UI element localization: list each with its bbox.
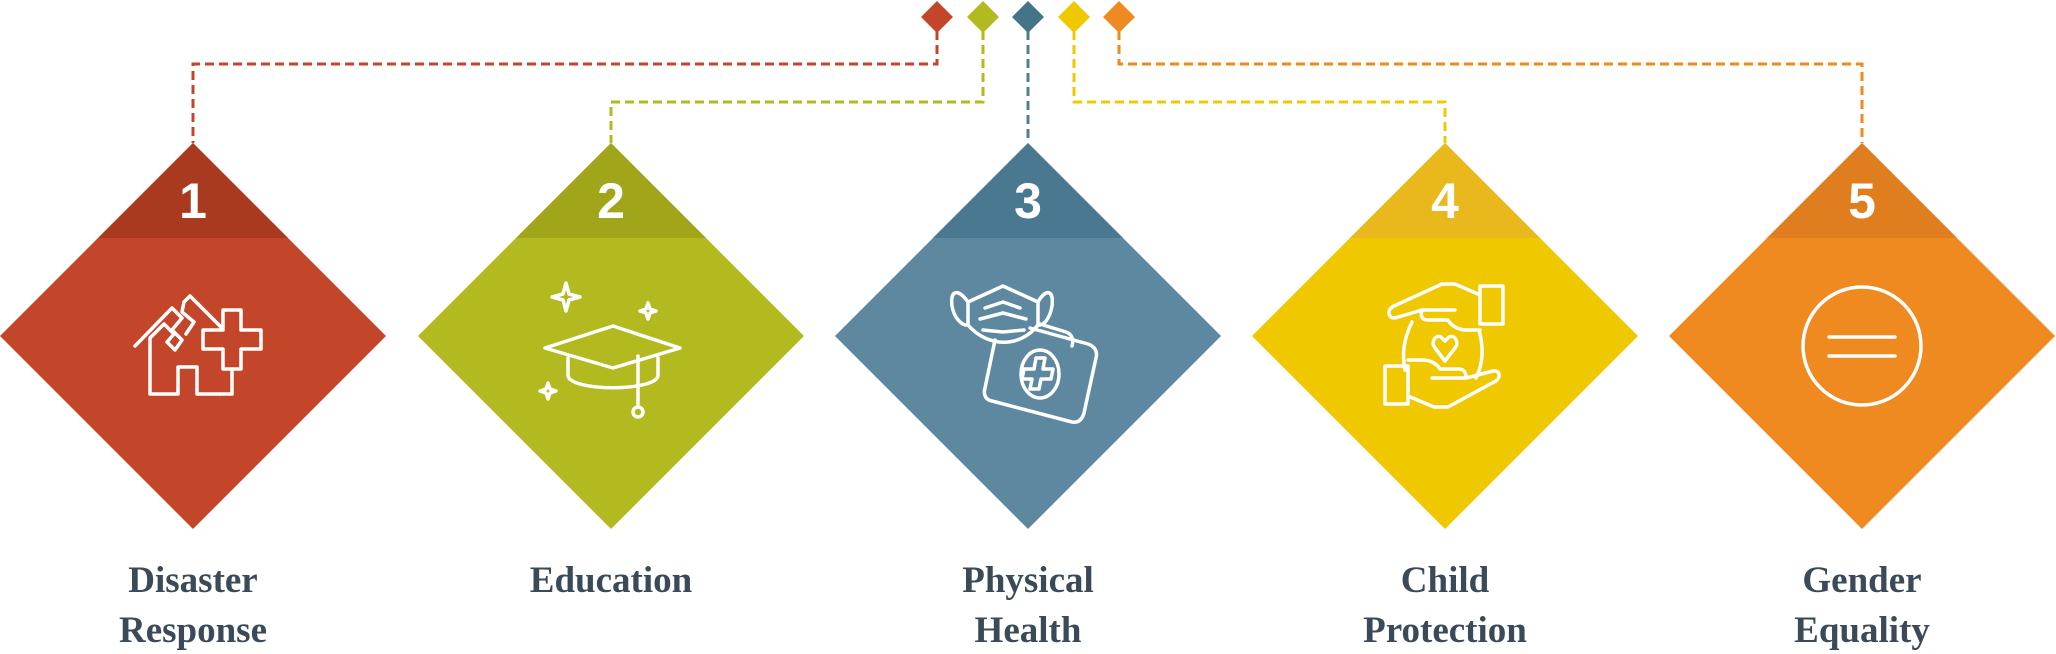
top markers [921,1,1135,33]
panel 3: Physical Health [835,143,1221,651]
panel 4: Child Protection: 4 [1431,173,1459,229]
panel 5: Gender Equality: Equality [1794,610,1930,651]
panel 2: Education [418,143,804,601]
panel 2: Education: Education [530,560,693,601]
panel 1: Disaster Response [0,143,386,651]
connector lines [193,17,1862,143]
panel 1: Disaster Response: Response [119,610,267,651]
icon: equals in circle [1803,287,1921,405]
panel 5: Gender Equality: Gender [1802,560,1922,601]
icon: hands protecting heart [1385,284,1503,407]
panel 4: Child Protection [1252,143,1638,651]
panel 1: Disaster Response: 1 [179,173,207,229]
panel 4: Child Protection: Child [1401,560,1490,601]
icon: damaged house [135,296,261,394]
panel 3: Physical Health: Health [975,610,1082,651]
panel 2: Education: 2 [597,173,625,229]
panel 1: Disaster Response: Disaster [128,560,258,601]
panel 3: Physical Health: 3 [1014,173,1042,229]
panel 5: Gender Equality: 5 [1848,173,1876,229]
panel 4: Child Protection: Protection [1363,610,1527,651]
panel 5: Gender Equality [1669,143,2055,651]
icon: mask and first aid kit [952,286,1097,422]
panel 3: Physical Health: Physical [962,560,1094,601]
icon: graduation cap [540,283,680,417]
